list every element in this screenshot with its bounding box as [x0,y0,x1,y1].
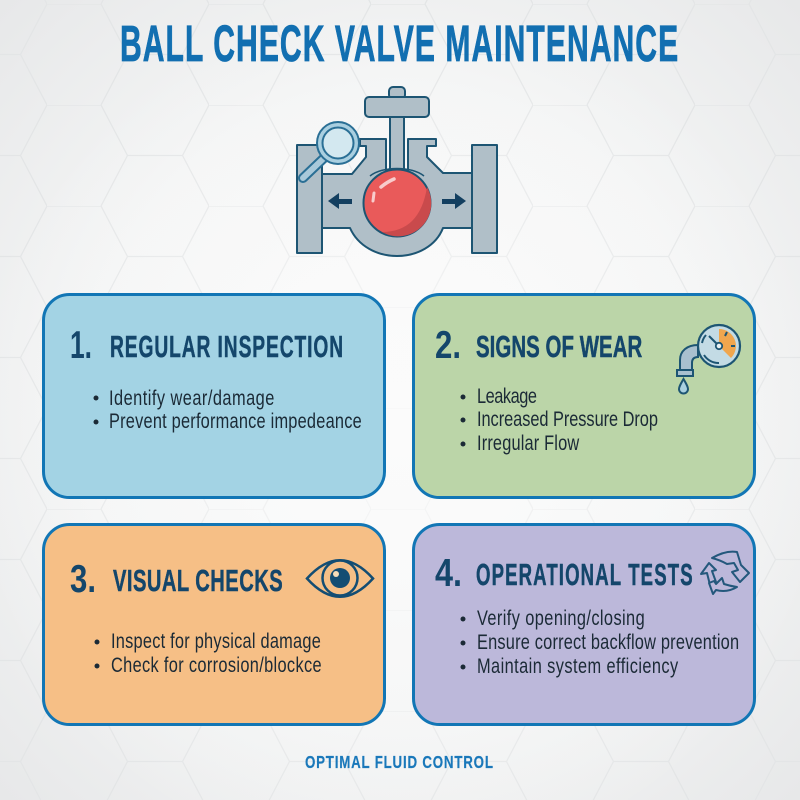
icon: recycling arrows [701,552,749,594]
bullet list: Prevent performance impedeance [109,409,362,432]
bullet list: Leakage [477,384,537,407]
bullet list: Inspect for physical damage [111,629,321,652]
heading: 1 regular inspection: REGULAR INSPECTION [110,331,343,364]
left flange [297,145,322,253]
bullet list [460,384,658,454]
heading: 2 signs of wear: 2. [435,324,461,367]
icon: eye [307,560,373,597]
bullet list: Check for corrosion/blockce [111,653,322,676]
bullet list: Increased Pressure Drop [477,407,658,430]
heading: 2 signs of wear [435,324,642,367]
heading: 3 visual checks: 3. [70,558,96,601]
panel: operational tests [414,524,754,724]
bullet list [94,629,322,676]
bullet list: Maintain system efficiency [477,654,679,677]
right flange [472,145,497,253]
heading: 3 visual checks [70,558,283,601]
bullet list: Ensure correct backflow prevention [477,630,739,653]
bullet list: Identify wear/damage [109,386,274,409]
title: BALL CHECK VALVE MAINTENANCE [120,15,678,72]
heading: 2 signs of wear: SIGNS OF WEAR [476,329,642,364]
arrow: left [328,193,352,209]
red ball [364,168,431,236]
icon: magnifying glass [303,122,359,178]
heading: 4 operational tests: OPERATIONAL TESTS [476,558,693,592]
arrow: right [442,193,466,209]
valve body [322,139,472,256]
heading: 3 visual checks: VISUAL CHECKS [113,563,283,598]
icon: leaking pipe and pressure gauge [677,325,740,394]
bullet list [94,386,362,432]
heading: 4 operational tests: 4. [435,552,462,595]
footer caption: OPTIMAL FLUID CONTROL [305,753,493,773]
panel: visual checks [44,524,384,724]
panel: regular inspection [44,294,384,498]
valve handle and stem [365,87,429,173]
heading: 1 regular inspection: 1. [70,324,92,367]
bullet list: Irregular Flow [477,431,580,454]
heading: 4 operational tests [435,552,693,595]
bullet list: Verify opening/closing [477,606,645,629]
panel: signs of wear [414,294,754,498]
bullet list [460,606,739,677]
illustration: ball check valve [297,87,497,256]
heading: 1 regular inspection [70,324,343,367]
